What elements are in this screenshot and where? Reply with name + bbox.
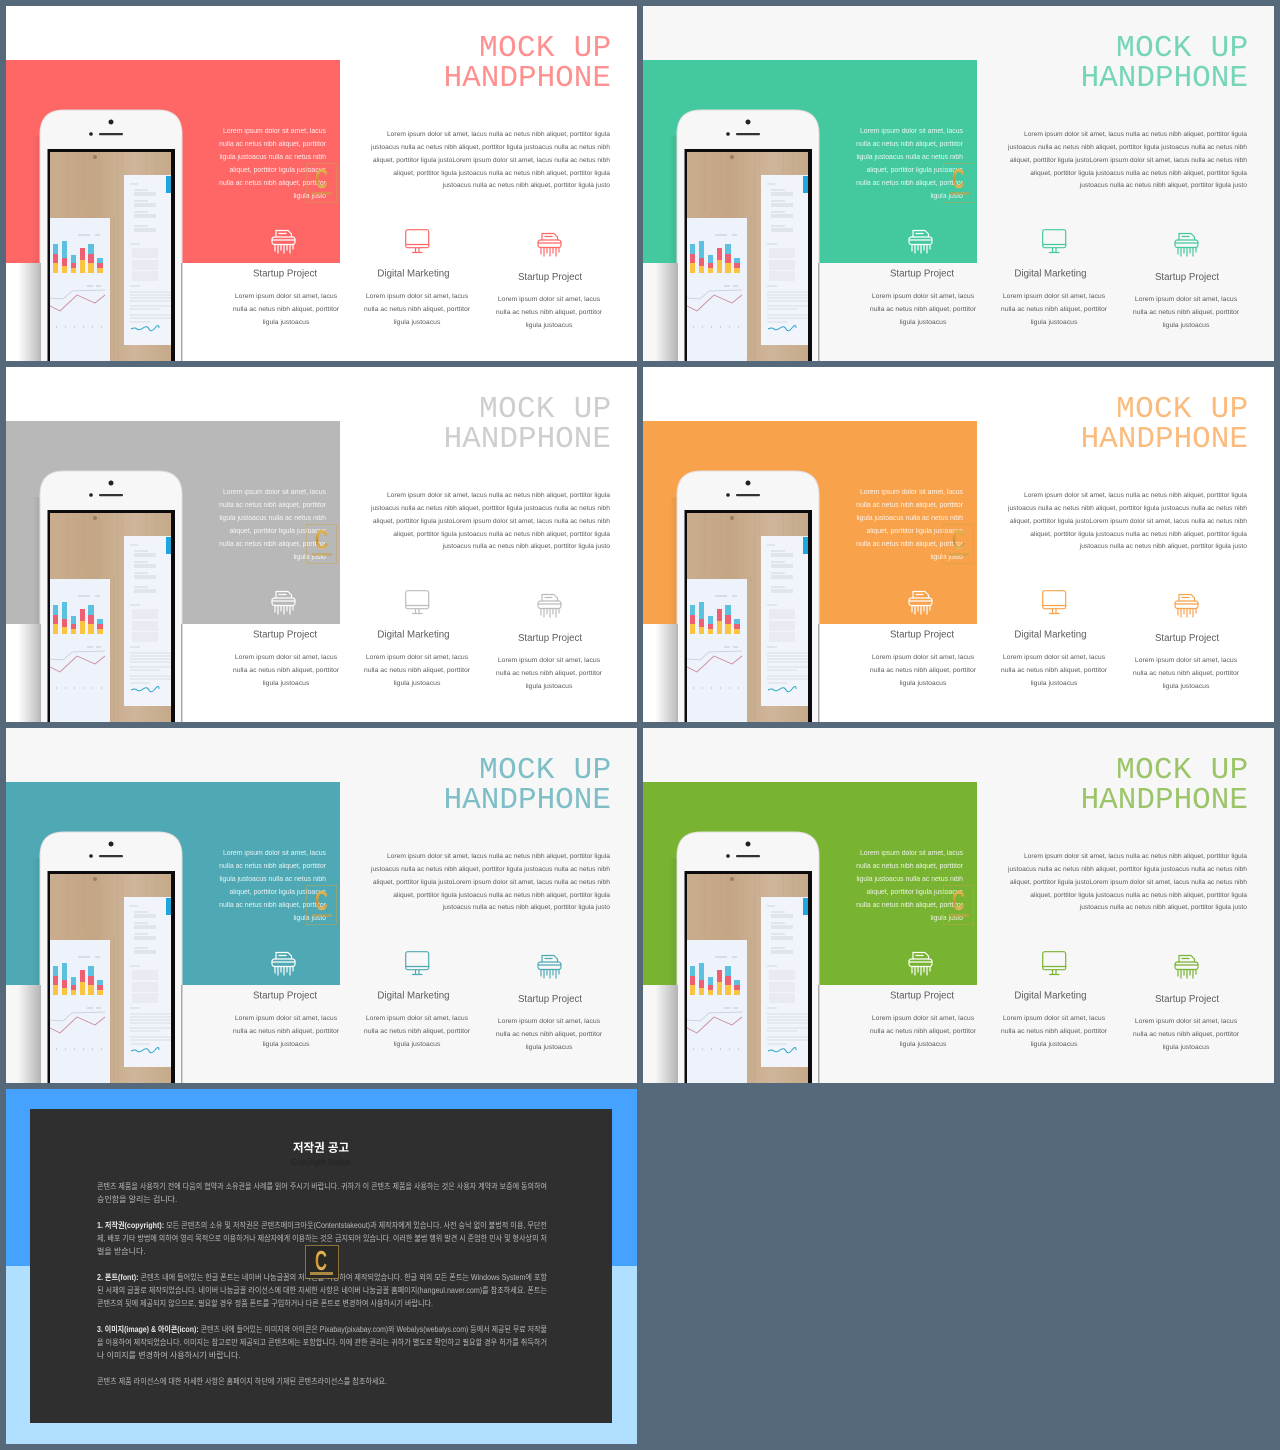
feature: digital marketing: ligula justoacus	[394, 1041, 441, 1048]
feature: startup project 2	[496, 633, 603, 690]
text block right: aliquet, porttitor ligula justoacus nulla ac netus nibh aliquet, porttitor ligula	[393, 892, 610, 899]
feature: startup project 2: ligula justoacus	[526, 1044, 573, 1051]
feature: digital marketing: Digital Marketing	[1014, 990, 1087, 1002]
watermark: C	[952, 163, 965, 194]
feature: startup project: ligula justoacus	[900, 1041, 947, 1048]
section 3: image and icon: 3. 이미지(image) & 아이콘(icon): 콘텐츠 내에 들어있는 이미지와 아이콘은 Pixabay(pixabay.com)와 Webalys(webalys.com) 등에서 제공된 무료 저작물	[97, 1324, 547, 1334]
watermark	[944, 885, 974, 924]
icon: monitor	[1043, 952, 1066, 974]
copyright heading: 저작권 공고	[293, 1140, 349, 1154]
feature: startup project: Lorem ipsum dolor sit amet, lacus	[872, 654, 975, 661]
feature: digital marketing: nulla ac netus nibh aliquet, porttitor	[1001, 667, 1108, 674]
feature: startup project: ligula justoacus	[263, 319, 310, 326]
feature: startup project: nulla ac netus nibh aliquet, porttitor	[233, 1028, 340, 1035]
feature: startup project 2: nulla ac netus nibh aliquet, porttitor	[496, 670, 603, 677]
text block right: aliquet, porttitor ligula justoacus nulla ac netus nibh aliquet, porttitor ligula	[1030, 892, 1247, 899]
text block right	[1007, 131, 1247, 189]
feature: startup project: Lorem ipsum dolor sit amet, lacus	[872, 293, 975, 300]
feature: startup project 2	[496, 994, 603, 1051]
feature: startup project 2: ligula justoacus	[1163, 322, 1210, 329]
panel: green slide	[643, 6, 1274, 361]
feature: digital marketing: Lorem ipsum dolor sit amet, lacus	[366, 654, 469, 661]
text block on band: aliquet, porttitor ligula justoacus	[229, 528, 327, 535]
text block on band: Lorem ipsum dolor sit amet, lacus	[223, 128, 327, 135]
feature: startup project: nulla ac netus nibh aliquet, porttitor	[870, 306, 977, 313]
colour band	[643, 60, 977, 263]
feature: startup project 2: Lorem ipsum dolor sit amet, lacus	[498, 657, 601, 664]
text block on band	[219, 850, 327, 922]
icon: shredder white	[909, 230, 932, 253]
feature: digital marketing: Lorem ipsum dolor sit amet, lacus	[1003, 293, 1106, 300]
feature: startup project: nulla ac netus nibh aliquet, porttitor	[870, 1028, 977, 1035]
colour band	[6, 782, 340, 985]
title	[1081, 31, 1248, 96]
feature: startup project 2: Lorem ipsum dolor sit amet, lacus	[498, 296, 601, 303]
text block on band: aliquet, porttitor ligula justoacus	[866, 889, 964, 896]
text block on band: aliquet, porttitor ligula justoacus	[866, 167, 964, 174]
feature: startup project	[870, 268, 977, 326]
watermark: C	[952, 885, 965, 916]
feature: startup project 2	[1133, 994, 1240, 1051]
feature: startup project 2: ligula justoacus	[526, 322, 573, 329]
text block on band: ligula justo	[293, 915, 326, 922]
feature: digital marketing: ligula justoacus	[394, 319, 441, 326]
text block on band: ligula justo	[293, 554, 326, 561]
text block on band: aliquet, porttitor ligula justoacus	[229, 167, 327, 174]
feature: startup project 2: nulla ac netus nibh aliquet, porttitor	[1133, 309, 1240, 316]
icon: monitor	[1043, 230, 1066, 252]
feature: digital marketing: Digital Marketing	[377, 990, 450, 1002]
text block on band: Lorem ipsum dolor sit amet, lacus	[860, 128, 964, 135]
text block right: Lorem ipsum dolor sit amet, lacus nulla ac netus nibh aliquet, porttitor ligula	[1024, 492, 1247, 499]
colour band	[643, 782, 977, 985]
section 1: copyright: 벌을 받습니다.	[97, 1246, 146, 1256]
phone mockup	[18, 471, 182, 723]
text block on band: nulla ac netus nibh aliquet, porttitor	[856, 180, 964, 187]
feature: startup project 2: Startup Project	[1155, 633, 1219, 644]
title: HANDPHONE	[1081, 61, 1248, 96]
feature: startup project: ligula justoacus	[263, 1041, 310, 1048]
watermark	[944, 524, 974, 564]
feature: digital marketing: ligula justoacus	[1031, 680, 1078, 687]
title: HANDPHONE	[444, 783, 611, 818]
text block right: justoacus nulla ac netus nibh aliquet, porttitor ligula justoacus nulla ac netus nibh	[1007, 505, 1247, 512]
feature: digital marketing: Lorem ipsum dolor sit amet, lacus	[366, 293, 469, 300]
watermark	[944, 163, 974, 202]
feature: startup project: Lorem ipsum dolor sit amet, lacus	[235, 293, 338, 300]
icon: shredder white	[909, 952, 932, 975]
text block on band: ligula justoacus nulla ac netus nibh	[856, 154, 963, 161]
text block right: Lorem ipsum dolor sit amet, lacus nulla ac netus nibh aliquet, porttitor ligula	[387, 131, 610, 138]
feature: digital marketing	[364, 630, 471, 687]
icon: shredder	[1175, 594, 1198, 617]
title: MOCK UP	[1116, 392, 1248, 427]
text block on band: ligula justoacus nulla ac netus nibh	[220, 154, 326, 161]
feature: startup project: nulla ac netus nibh aliquet, porttitor	[233, 306, 340, 313]
watermark	[306, 163, 336, 202]
text block right: justoacus nulla ac netus nibh aliquet, porttitor ligula justoacus nulla ac netus nibh	[1007, 144, 1247, 151]
panel: teal slide	[6, 728, 637, 1083]
watermark	[306, 885, 336, 924]
feature: startup project: Lorem ipsum dolor sit amet, lacus	[235, 654, 338, 661]
watermark: C	[315, 524, 328, 555]
text block right: justoacus nulla ac netus nibh aliquet, porttitor ligula justo	[1079, 904, 1247, 911]
text block on band: ligula justo	[930, 554, 963, 561]
title: HANDPHONE	[1081, 783, 1248, 818]
feature: startup project: Startup Project	[890, 268, 954, 280]
phone mockup	[655, 471, 820, 723]
section 2: font	[97, 1272, 548, 1308]
feature: digital marketing: Digital Marketing	[1014, 630, 1087, 640]
feature: digital marketing: nulla ac netus nibh aliquet, porttitor	[1001, 1028, 1108, 1035]
feature: digital marketing	[364, 268, 471, 326]
watermark	[306, 524, 336, 564]
feature: digital marketing: nulla ac netus nibh aliquet, porttitor	[364, 1028, 471, 1035]
text block on band	[856, 850, 964, 922]
text block right: aliquet, porttitor ligula justoLorem ipsum dolor sit amet, lacus nulla ac netus nibh	[1010, 157, 1247, 164]
text block right: aliquet, porttitor ligula justoLorem ipsum dolor sit amet, lacus nulla ac netus nibh	[1010, 518, 1247, 525]
feature: startup project: Startup Project	[253, 990, 317, 1002]
text block right	[370, 131, 610, 189]
text block right: Lorem ipsum dolor sit amet, lacus nulla ac netus nibh aliquet, porttitor ligula	[1024, 131, 1247, 138]
text block on band: Lorem ipsum dolor sit amet, lacus	[223, 850, 327, 857]
text block on band: nulla ac netus nibh aliquet, porttitor	[219, 863, 327, 870]
feature: startup project: Startup Project	[253, 268, 317, 280]
feature: startup project 2	[1133, 272, 1240, 329]
text block right: justoacus nulla ac netus nibh aliquet, porttitor ligula justo	[1079, 543, 1247, 550]
text block on band: ligula justo	[930, 915, 963, 922]
section 3: image and icon: 을 이용하여 제작되었습니다. 이미지는 참고로만 제공되고 콘텐츠에는 포함합니다. 이에 관한 권리는 귀하가 별도로 확인하고 필요할 경우 허가를 취득하거	[97, 1337, 547, 1347]
text block on band: ligula justoacus nulla ac netus nibh	[220, 515, 326, 522]
title	[444, 31, 612, 96]
feature: startup project 2: nulla ac netus nibh aliquet, porttitor	[496, 1031, 603, 1038]
feature: startup project 2: nulla ac netus nibh aliquet, porttitor	[1133, 670, 1240, 677]
copyright heading: Copyright Notice	[291, 1158, 351, 1167]
feature: digital marketing: Lorem ipsum dolor sit amet, lacus	[1003, 1015, 1106, 1022]
phone mockup	[655, 832, 820, 1084]
panel: copyright notice	[6, 1089, 637, 1444]
text block right: aliquet, porttitor ligula justoacus nulla ac netus nibh aliquet, porttitor ligula	[1030, 531, 1247, 538]
phone mockup	[655, 110, 820, 362]
phone mockup	[18, 832, 182, 1084]
section 3: image and icon	[97, 1324, 547, 1360]
feature: digital marketing	[1001, 268, 1108, 326]
title: HANDPHONE	[1081, 422, 1248, 457]
closing note: 콘텐츠 제품 라이선스에 대한 자세한 사항은 홈페이지 하단에 기재된 콘텐츠라이선스를 참조하세요.	[97, 1376, 387, 1386]
feature: startup project 2	[1133, 633, 1240, 690]
colour band	[643, 421, 977, 624]
text block on band: aliquet, porttitor ligula justoacus	[866, 528, 964, 535]
title: HANDPHONE	[444, 61, 611, 96]
icon: shredder	[538, 234, 561, 256]
text block on band: nulla ac netus nibh aliquet, porttitor	[219, 902, 327, 909]
feature: startup project: nulla ac netus nibh aliquet, porttitor	[870, 667, 977, 674]
text block right: justoacus nulla ac netus nibh aliquet, porttitor ligula justoacus nulla ac netus nibh	[370, 144, 610, 151]
phone mockup	[18, 110, 182, 362]
text block right: justoacus nulla ac netus nibh aliquet, porttitor ligula justoacus nulla ac netus nibh	[370, 505, 610, 512]
section 1: copyright: 제, 배포 기타 방법에 의하여 영리 목적으로 이용하거나 제삼자에게 이용하는 것은 금지되어 있습니다. 이러한 불법 행위 발견 시 준엄한 민사 및 형사상의 처	[97, 1233, 547, 1243]
text block on band: ligula justoacus nulla ac netus nibh	[856, 876, 963, 883]
feature: startup project	[870, 990, 977, 1048]
panel: grey slide	[6, 367, 637, 722]
text block right: aliquet, porttitor ligula justoLorem ipsum dolor sit amet, lacus nulla ac netus nibh	[373, 157, 610, 164]
colour band	[6, 60, 340, 263]
text block on band: nulla ac netus nibh aliquet, porttitor	[856, 502, 964, 509]
title: MOCK UP	[479, 392, 612, 427]
feature: startup project 2: Startup Project	[1155, 272, 1219, 283]
watermark: C	[315, 1245, 327, 1276]
text block right	[1007, 492, 1247, 550]
feature: startup project 2: Lorem ipsum dolor sit amet, lacus	[1135, 1018, 1238, 1025]
feature: digital marketing: ligula justoacus	[1031, 319, 1078, 326]
text block on band: nulla ac netus nibh aliquet, porttitor	[219, 541, 327, 548]
title: MOCK UP	[1116, 31, 1248, 66]
text block on band: Lorem ipsum dolor sit amet, lacus	[860, 850, 964, 857]
text block on band: Lorem ipsum dolor sit amet, lacus	[860, 489, 964, 496]
icon: monitor	[406, 952, 429, 974]
text block on band: Lorem ipsum dolor sit amet, lacus	[223, 489, 327, 496]
icon: shredder	[538, 956, 561, 978]
feature: startup project: Startup Project	[890, 990, 954, 1002]
icon: shredder white	[909, 592, 932, 614]
text block right: aliquet, porttitor ligula justoacus nulla ac netus nibh aliquet, porttitor ligula	[393, 170, 610, 177]
feature: startup project 2: Startup Project	[518, 633, 582, 644]
text block on band	[856, 128, 964, 200]
icon: monitor	[406, 591, 429, 614]
text block right: justoacus nulla ac netus nibh aliquet, porttitor ligula justo	[1079, 182, 1247, 189]
text block right	[1007, 853, 1247, 911]
text block on band: nulla ac netus nibh aliquet, porttitor	[219, 180, 327, 187]
feature: startup project 2: nulla ac netus nibh aliquet, porttitor	[1133, 1031, 1240, 1038]
text block right: justoacus nulla ac netus nibh aliquet, porttitor ligula justo	[442, 904, 610, 911]
text block on band: nulla ac netus nibh aliquet, porttitor	[856, 141, 964, 148]
feature: startup project: Lorem ipsum dolor sit amet, lacus	[235, 1015, 338, 1022]
text block right: aliquet, porttitor ligula justoLorem ipsum dolor sit amet, lacus nulla ac netus nibh	[373, 879, 610, 886]
section 2: font: 2. 폰트(font): 콘텐츠 내에 들어있는 한글 폰트는 네이버 나눔글꼴의 저작권을 허용하여 제작되었습니다. 한글 외의 모든 폰트는 Windows System에 포함	[97, 1272, 548, 1282]
icon: shredder white	[272, 230, 295, 253]
feature: digital marketing: Lorem ipsum dolor sit amet, lacus	[366, 1015, 469, 1022]
text block right: aliquet, porttitor ligula justoacus nulla ac netus nibh aliquet, porttitor ligula	[1030, 170, 1247, 177]
feature: startup project 2: nulla ac netus nibh aliquet, porttitor	[496, 309, 603, 316]
watermark: C	[315, 885, 328, 916]
section 1: copyright: 1. 저작권(copyright): 모든 콘텐츠의 소유 및 저작권은 콘텐츠메이크아웃(Contentstakeout)과 제작자에게 있습니다. 사전 승낙 없이 불법적 이용, 무단전	[97, 1220, 547, 1230]
text block on band: ligula justoacus nulla ac netus nibh	[856, 515, 963, 522]
panel: lime green slide	[643, 728, 1274, 1083]
watermark: C	[315, 163, 328, 194]
title: HANDPHONE	[444, 422, 611, 457]
watermark: C	[952, 524, 965, 555]
section 2: font: 콘텐츠의 뒷에 제공되지 않으므로, 필요할 경우 정품 폰트를 구입하거나 다른 폰트로 변경하여 사용하시기 바랍니다.	[97, 1298, 433, 1308]
feature: startup project: Lorem ipsum dolor sit amet, lacus	[872, 1015, 975, 1022]
panel: red slide	[6, 6, 637, 361]
text block on band: nulla ac netus nibh aliquet, porttitor	[219, 502, 327, 509]
text block on band: nulla ac netus nibh aliquet, porttitor	[856, 863, 964, 870]
feature: startup project: nulla ac netus nibh aliquet, porttitor	[233, 667, 340, 674]
feature: digital marketing: Digital Marketing	[377, 268, 450, 280]
text block right: aliquet, porttitor ligula justoLorem ipsum dolor sit amet, lacus nulla ac netus nibh	[1010, 879, 1247, 886]
text block right: justoacus nulla ac netus nibh aliquet, porttitor ligula justoacus nulla ac netus nibh	[370, 866, 610, 873]
feature: startup project 2: Lorem ipsum dolor sit amet, lacus	[1135, 296, 1238, 303]
section 3: image and icon: 나 이미지를 변경하여 사용하시기 바랍니다.	[97, 1350, 241, 1360]
feature: digital marketing: ligula justoacus	[1031, 1041, 1078, 1048]
feature: digital marketing	[1001, 630, 1108, 687]
icon: shredder	[538, 594, 561, 617]
feature: startup project	[233, 630, 340, 687]
section 2: font: 된 서체의 글꼴로 제작되었습니다. 네이버 나눔글꼴 라이선스에 대한 자세한 사항은 네이버 나눔글꼴 홈페이지(hangeul.naver.com)를 참조하세요. 폰트는	[97, 1285, 547, 1295]
text block on band	[219, 128, 327, 200]
text block right: aliquet, porttitor ligula justoLorem ipsum dolor sit amet, lacus nulla ac netus nibh	[373, 518, 610, 525]
feature: startup project 2: Lorem ipsum dolor sit amet, lacus	[1135, 657, 1238, 664]
feature: startup project: ligula justoacus	[900, 680, 947, 687]
text block on band	[219, 489, 327, 561]
text block right: Lorem ipsum dolor sit amet, lacus nulla ac netus nibh aliquet, porttitor ligula	[1024, 853, 1247, 860]
icon: shredder white	[272, 952, 295, 975]
text block on band: ligula justo	[293, 193, 326, 200]
text block right: aliquet, porttitor ligula justoacus nulla ac netus nibh aliquet, porttitor ligula	[393, 531, 610, 538]
title	[444, 392, 612, 457]
title	[1081, 392, 1248, 457]
feature: startup project 2	[496, 272, 603, 329]
text block on band: ligula justoacus nulla ac netus nibh	[220, 876, 326, 883]
title: MOCK UP	[479, 31, 612, 66]
feature: startup project 2: ligula justoacus	[526, 683, 573, 690]
feature: digital marketing: Lorem ipsum dolor sit amet, lacus	[1003, 654, 1106, 661]
feature: digital marketing	[1001, 990, 1108, 1048]
icon: shredder	[1175, 234, 1198, 256]
section 1: copyright	[97, 1220, 547, 1256]
title: MOCK UP	[1116, 753, 1248, 788]
text block on band: aliquet, porttitor ligula justoacus	[229, 889, 327, 896]
text block right: justoacus nulla ac netus nibh aliquet, porttitor ligula justo	[442, 543, 610, 550]
text block on band: nulla ac netus nibh aliquet, porttitor	[856, 541, 964, 548]
text block right	[370, 492, 610, 550]
feature: digital marketing: Digital Marketing	[1014, 268, 1087, 280]
feature: digital marketing: nulla ac netus nibh aliquet, porttitor	[1001, 306, 1108, 313]
feature: startup project 2: ligula justoacus	[1163, 1044, 1210, 1051]
feature: startup project 2: Startup Project	[518, 994, 582, 1005]
feature: startup project	[870, 630, 977, 687]
text block right	[370, 853, 610, 911]
icon: monitor	[406, 230, 429, 252]
icon: shredder	[1175, 956, 1198, 978]
intro paragraph: 콘텐츠 제품을 사용하기 전에 다음의 협약과 소유권을 사례를 읽어 주시기 바랍니다. 귀하가 이 콘텐츠 제품을 사용하는 것은 사용자 계약과 보증에 동의하여	[97, 1181, 547, 1191]
icon: shredder white	[272, 592, 295, 614]
text block on band: nulla ac netus nibh aliquet, porttitor	[856, 902, 964, 909]
feature: startup project 2: Startup Project	[1155, 994, 1219, 1005]
feature: startup project: ligula justoacus	[263, 680, 310, 687]
text block on band	[856, 489, 964, 561]
title: MOCK UP	[479, 753, 612, 788]
copyright heading	[291, 1140, 351, 1167]
feature: startup project	[233, 990, 340, 1048]
feature: digital marketing	[364, 990, 471, 1048]
feature: startup project: Startup Project	[253, 630, 317, 640]
text block right: Lorem ipsum dolor sit amet, lacus nulla ac netus nibh aliquet, porttitor ligula	[387, 853, 610, 860]
text block on band: ligula justo	[930, 193, 963, 200]
intro paragraph	[97, 1181, 547, 1204]
feature: startup project	[233, 268, 340, 326]
title	[1081, 753, 1248, 818]
feature: startup project 2: Startup Project	[518, 272, 582, 283]
colour band	[6, 421, 340, 624]
watermark	[306, 1245, 338, 1278]
feature: startup project 2: ligula justoacus	[1163, 683, 1210, 690]
text block right: justoacus nulla ac netus nibh aliquet, porttitor ligula justo	[442, 182, 610, 189]
feature: startup project 2: Lorem ipsum dolor sit amet, lacus	[498, 1018, 601, 1025]
icon: monitor	[1043, 591, 1066, 614]
panel: orange slide	[643, 367, 1274, 722]
intro paragraph: 승인함을 알리는 겁니다.	[97, 1194, 177, 1204]
feature: digital marketing: Digital Marketing	[377, 630, 450, 640]
feature: digital marketing: nulla ac netus nibh aliquet, porttitor	[364, 306, 471, 313]
text block right: justoacus nulla ac netus nibh aliquet, porttitor ligula justoacus nulla ac netus nibh	[1007, 866, 1247, 873]
feature: startup project: Startup Project	[890, 630, 954, 640]
text block on band: nulla ac netus nibh aliquet, porttitor	[219, 141, 327, 148]
text block right: Lorem ipsum dolor sit amet, lacus nulla ac netus nibh aliquet, porttitor ligula	[387, 492, 610, 499]
feature: startup project: ligula justoacus	[900, 319, 947, 326]
feature: digital marketing: ligula justoacus	[394, 680, 441, 687]
title	[444, 753, 612, 818]
feature: digital marketing: nulla ac netus nibh aliquet, porttitor	[364, 667, 471, 674]
